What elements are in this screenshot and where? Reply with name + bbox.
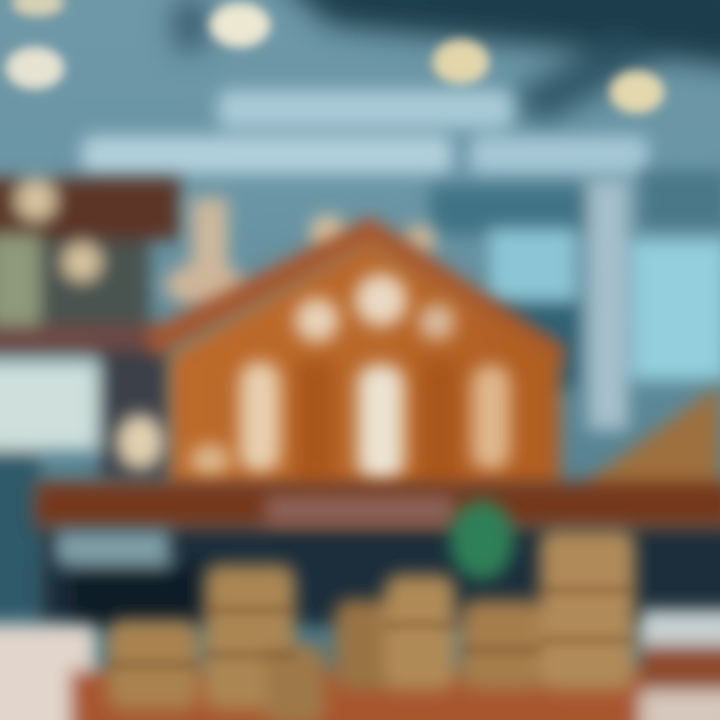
shelf band: [35, 482, 720, 528]
lower dark area: [40, 525, 720, 625]
coin stack 4: [335, 600, 405, 690]
house body: [170, 240, 560, 490]
house windows: [116, 274, 510, 480]
floor: [0, 610, 720, 720]
coin stack 1: [108, 620, 198, 710]
shelf label: [265, 495, 455, 525]
left brown shelf area: [0, 178, 436, 620]
house: [116, 232, 560, 490]
title line 2: [82, 136, 452, 174]
ceiling lights: [6, 0, 664, 113]
roof: [150, 232, 560, 360]
title line 2 end: [470, 136, 648, 174]
coin stack 7: [540, 530, 635, 690]
right windows: [430, 170, 720, 430]
coin stack 6: [462, 600, 542, 690]
ceiling shadow: [175, 0, 720, 125]
house pillars shading: [295, 360, 460, 480]
coin stacks: [108, 530, 635, 720]
title line 1: [218, 90, 513, 128]
coin stack 3: [265, 645, 325, 720]
coin stack 2: [205, 565, 295, 710]
left lower panel: [55, 530, 200, 625]
green plant: [450, 500, 514, 580]
coin banding: [108, 590, 635, 665]
coin stack 5: [385, 575, 455, 690]
title: [82, 90, 648, 174]
right wooden stack: [590, 385, 720, 510]
